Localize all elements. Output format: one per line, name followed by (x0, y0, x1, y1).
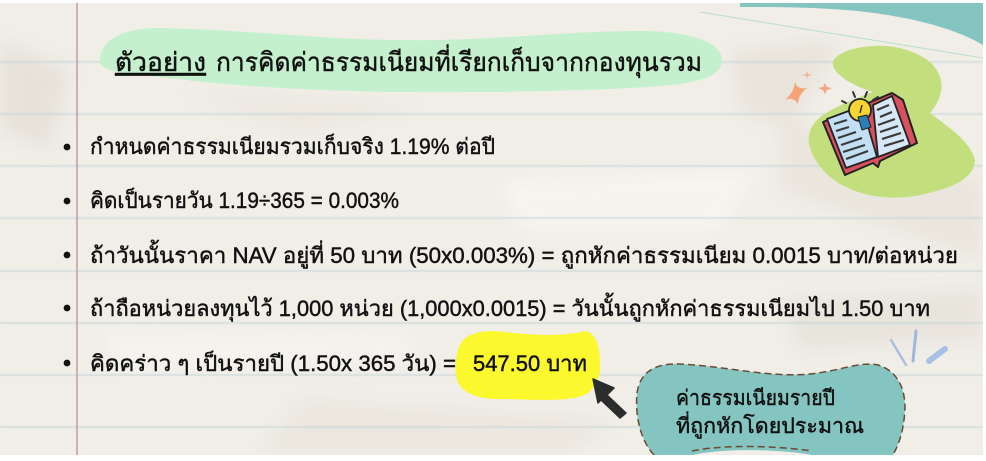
bullet 2: คิดเป็นรายวัน 1.19÷365 = 0.003% (90, 186, 399, 213)
right page (873, 96, 910, 157)
bullet 4: ถ้าถือหน่วยลงทุนไว้ 1,000 หน่วย (1,000x0.0015) = วันนั้นถูกหักค่าธรรมเนียมไป 1.50 บาท (90, 293, 930, 322)
yellow highlight (455, 331, 600, 400)
title highlight (100, 28, 722, 92)
red cover (823, 93, 917, 175)
title: ตัวอย่าง (115, 47, 206, 77)
bullet list (64, 132, 958, 376)
highlighted amount: 547.50 บาท (473, 351, 587, 376)
bullet 1: กำหนดค่าธรรมเนียมรวมเก็บจริง 1.19% ต่อปี (90, 132, 495, 159)
callout text (676, 387, 864, 439)
bullet 3: ถ้าวันนั้นราคา NAV อยู่ที่ 50 บาท (50x0.003%) = ถูกหักค่าธรรมเนียม 0.0015 บาท/ต่อหน่วย (90, 240, 958, 269)
green blob (809, 46, 975, 198)
arrow cursor (593, 379, 626, 418)
lightbulb (849, 99, 871, 121)
callout text: ค่าธรรมเนียมรายปี (676, 387, 835, 410)
title: การคิดค่าธรรมเนียมที่เรียกเก็บจากกองทุนรวม (216, 44, 702, 78)
callout (637, 364, 905, 455)
icon: open book with lightbulb (823, 92, 917, 175)
bullet 5: คิดคร่าว ๆ เป็นรายปี (1.50x 365 วัน) = (90, 349, 456, 376)
decorative blue strokes (891, 331, 945, 365)
sparkles (785, 71, 832, 104)
left page (827, 106, 877, 168)
callout text: ที่ถูกหักโดยประมาณ (676, 411, 864, 439)
teal corner shape (740, 3, 983, 45)
